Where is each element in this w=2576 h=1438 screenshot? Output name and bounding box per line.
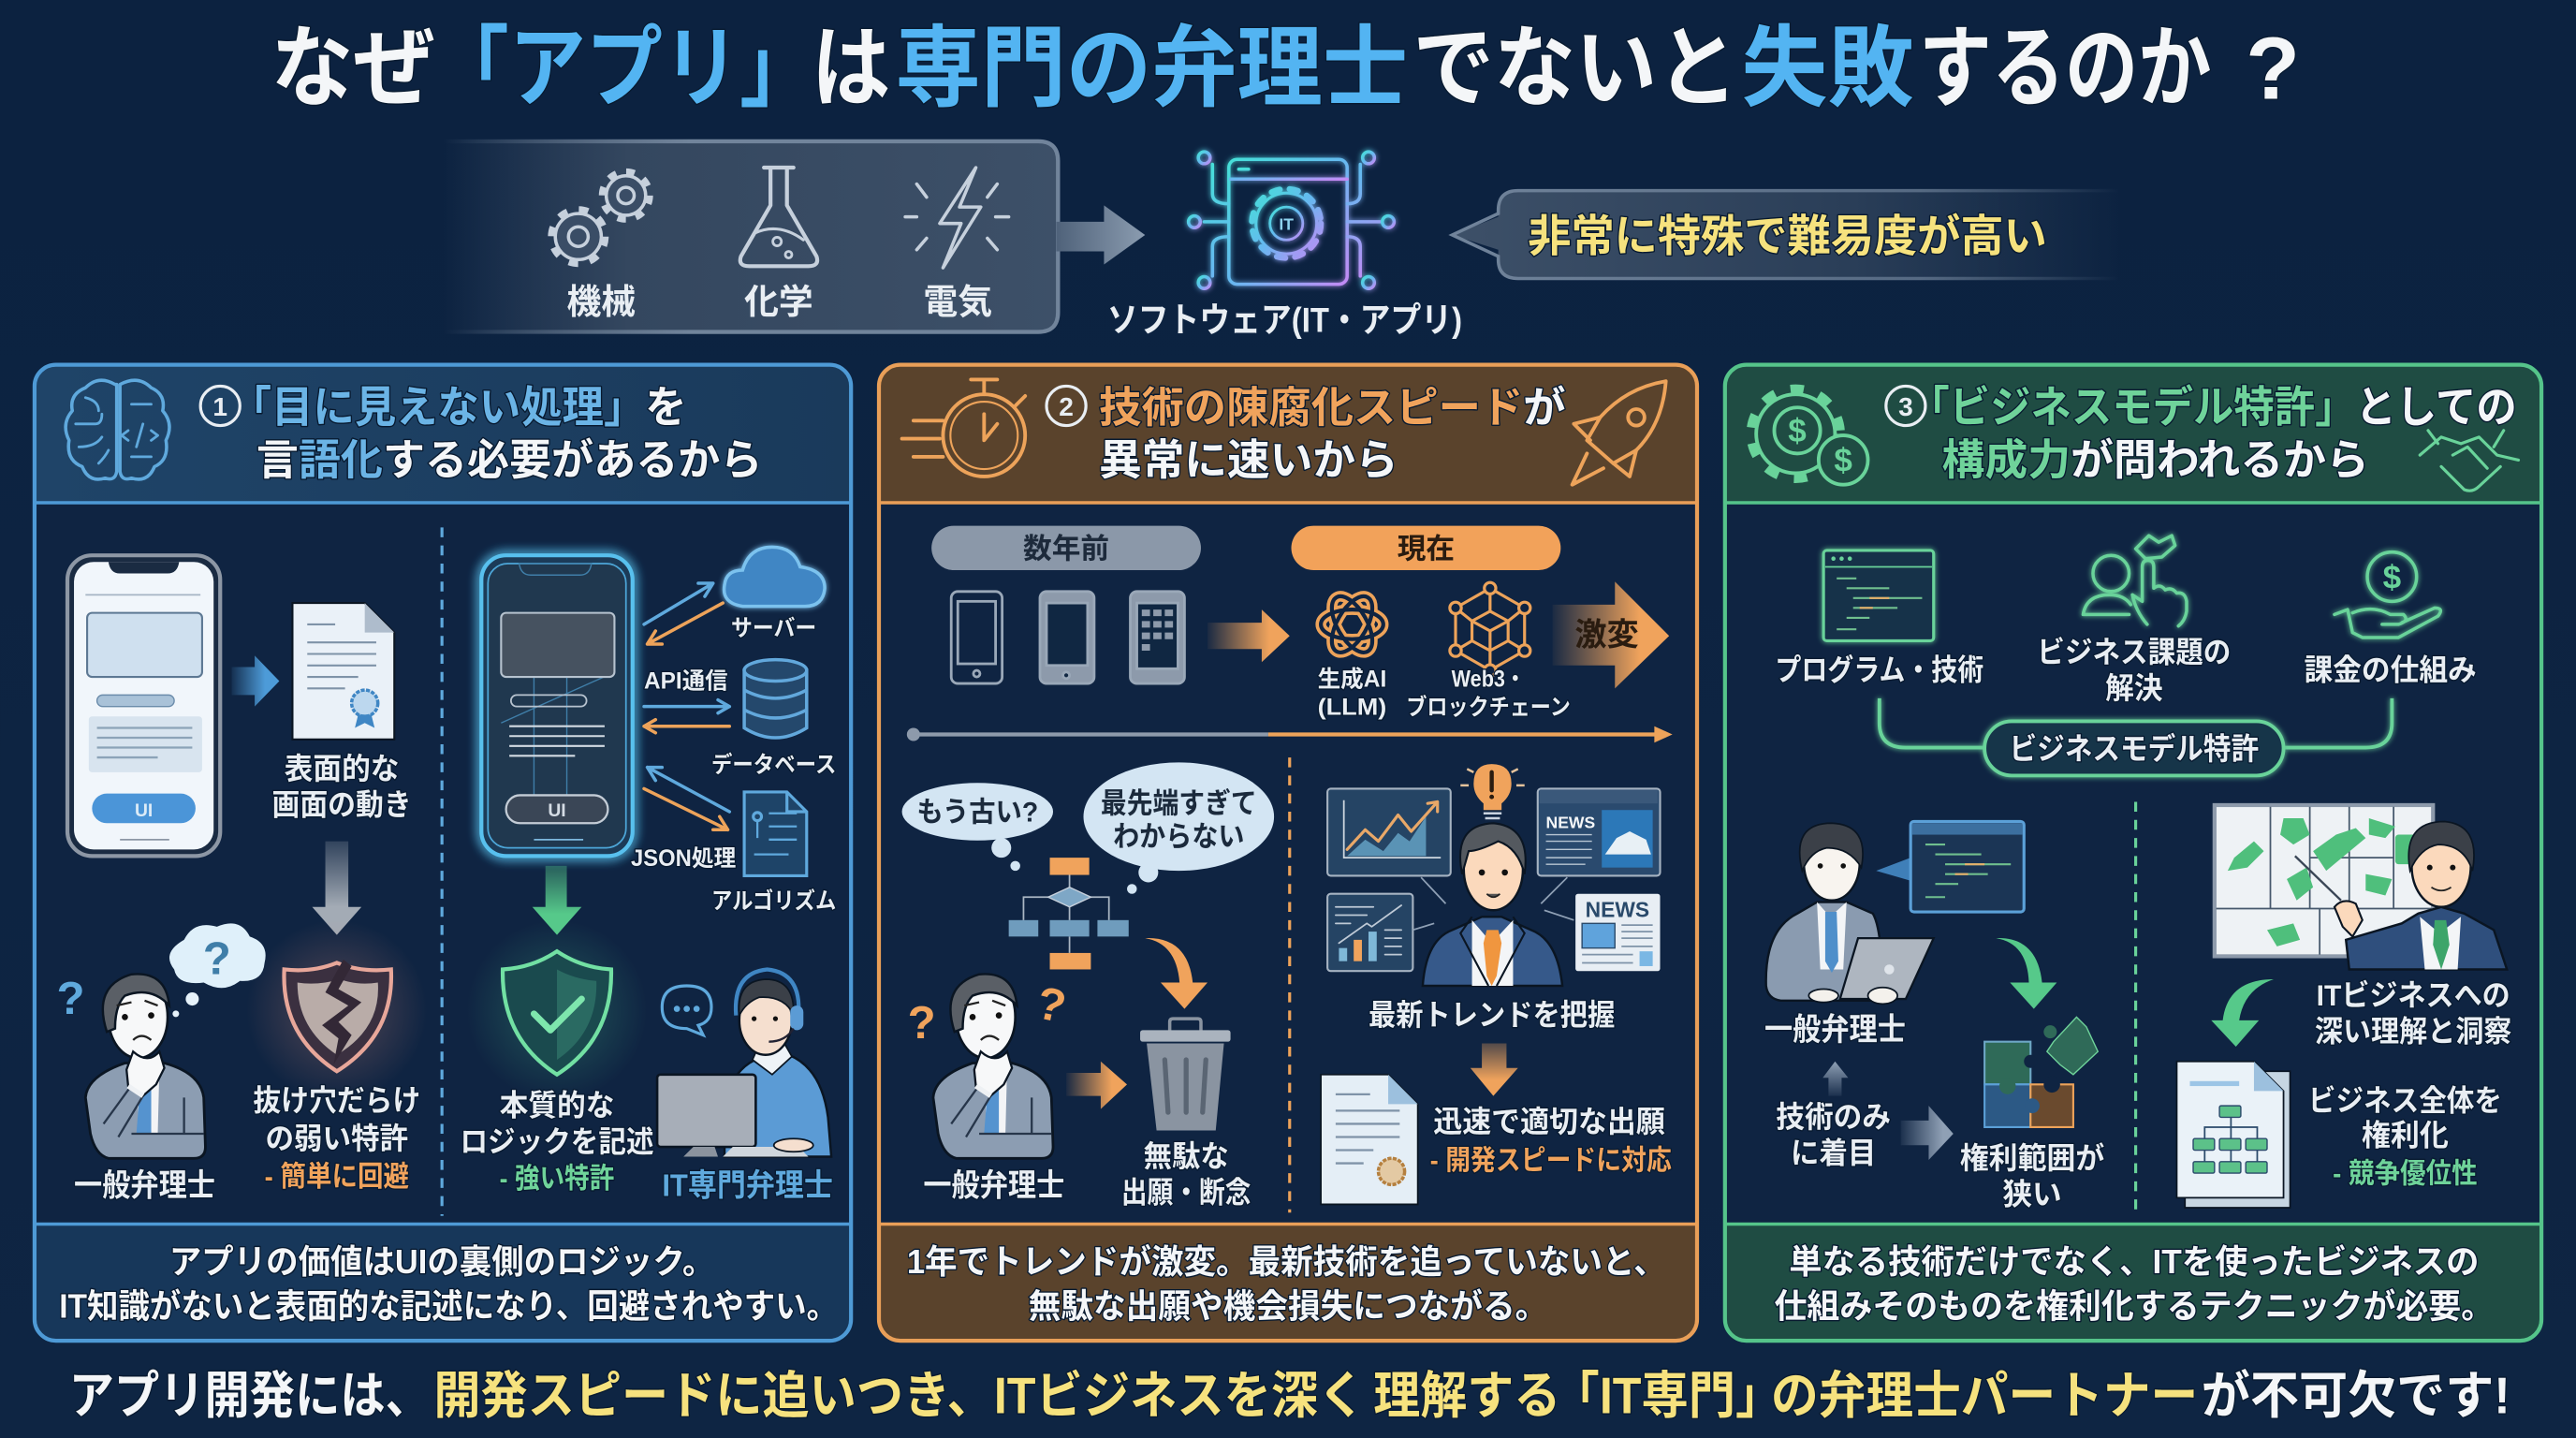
label: business problem: ビジネス課題の xyxy=(2037,635,2231,668)
label: IT business: ITビジネスへの xyxy=(2317,978,2510,1012)
label: general attorney: 一般弁理士 xyxy=(74,1169,215,1204)
icon: general attorney thinking xyxy=(933,974,1053,1158)
label: weak patent: の弱い特許 xyxy=(265,1122,408,1155)
heading number: 2 xyxy=(1059,392,1074,421)
pill: years ago xyxy=(931,526,1201,570)
heading number xyxy=(1886,386,1925,426)
connector xyxy=(1950,591,2323,593)
panel 2 footer xyxy=(879,1224,1697,1341)
callout: very special and difficult xyxy=(1453,190,2119,279)
speech bubble: too cutting edge: わからない xyxy=(1113,820,1244,853)
icon: person with pointing hand xyxy=(2083,536,2187,626)
icon: question marks xyxy=(908,977,1070,1049)
label: blockchain: ブロックチェーン xyxy=(1406,693,1571,720)
title: 「アプリ」 xyxy=(432,19,816,118)
panel 1 footer xyxy=(35,1224,851,1341)
phone: UI surface xyxy=(67,555,220,856)
icon: question marks: ? xyxy=(1032,977,1070,1033)
icon: patent document xyxy=(292,603,394,740)
callout: very special and difficult: 非常に特殊で難易度が高い xyxy=(1528,213,2047,262)
label: LLM: (LLM) xyxy=(1318,695,1386,720)
pointer lines xyxy=(1412,877,1573,930)
speech bubble: too cutting edge: 最先端すぎて xyxy=(1101,787,1257,820)
label: filing, abandonment: 出願・断念 xyxy=(1121,1176,1251,1210)
speech bubble: already old?: もう古い? xyxy=(916,798,1038,829)
icon: thought bubble xyxy=(169,923,266,1017)
icon: lightning bolt xyxy=(905,168,1009,268)
panel 3: business model patents xyxy=(1725,365,2541,1341)
bottom message xyxy=(69,1367,2510,1424)
title: は xyxy=(812,19,890,118)
label: 化学: 化学 xyxy=(744,283,813,321)
icon: web3 network xyxy=(1450,582,1530,676)
arrow: curved to puzzle xyxy=(1996,938,2056,1009)
bottom message: ITビジネスを深く xyxy=(994,1367,1365,1424)
pill: years ago: 数年前 xyxy=(1023,533,1109,565)
panel 3 footer: 仕組みそのものを権利化するテクニックが必要。 xyxy=(1774,1287,2494,1326)
label: deep understanding: 深い理解と洞察 xyxy=(2315,1015,2511,1049)
panel 1 heading line 2: 言語化する必要があるから xyxy=(256,436,762,484)
arrow: up xyxy=(1822,1062,1848,1096)
code bubble xyxy=(1876,822,2024,912)
icon: dollar sign: $ xyxy=(2383,559,2402,595)
business model patent connector: ビジネスモデル特許 xyxy=(2009,731,2259,766)
arrow: to filing xyxy=(1471,1043,1518,1096)
title: するのか xyxy=(1919,19,2211,118)
label: competitive advantage: - 競争優位性 xyxy=(2333,1159,2478,1190)
icon: broken shield xyxy=(246,920,427,1101)
bottom message: 開発スピードに追いつき、 xyxy=(433,1367,994,1424)
panel 2 header xyxy=(879,365,1697,503)
label: generative AI: 生成AI xyxy=(1318,667,1386,693)
panel 1 footer: IT知識がないと表面的な記述になり、回避されやすい。 xyxy=(59,1287,838,1326)
label: wasteful: 無駄な xyxy=(1144,1139,1229,1173)
arrow: dramatic change xyxy=(1553,581,1669,688)
icon: thought bubble: ? xyxy=(203,934,231,985)
label: Web3: Web3・ xyxy=(1452,668,1526,693)
icon: presenting attorney xyxy=(2295,822,2507,969)
label: narrow rights: 権利範囲が xyxy=(1960,1141,2104,1175)
arrow: curved to doc xyxy=(2211,979,2274,1047)
icon: software chip xyxy=(1189,152,1394,288)
icon: org chart document xyxy=(2176,1062,2291,1208)
heading number: 1 xyxy=(212,392,227,421)
chart screen xyxy=(1327,788,1451,875)
icon: old phones xyxy=(951,592,1184,683)
icon: brain xyxy=(66,380,169,479)
icon: software chip: IT xyxy=(1279,215,1294,234)
panel 2 footer: 無駄な出願や機会損失につながる。 xyxy=(1029,1287,1547,1326)
label: logic described: ロジックを記述 xyxy=(460,1124,654,1158)
panel 2 heading line 2: 異常に速いから xyxy=(1099,436,1398,484)
label: 電気: 電気 xyxy=(923,283,992,321)
label: software: ソフトウェア(IT・アプリ) xyxy=(1107,301,1462,340)
panel 3 heading: 「ビジネスモデル特許」としての xyxy=(1909,383,2517,432)
pill: now xyxy=(1292,526,1560,570)
icon: data flow arrows xyxy=(644,583,729,829)
icon: cloud server xyxy=(724,547,825,607)
label: general attorney: 一般弁理士 xyxy=(923,1169,1064,1204)
icon: attorney with laptop xyxy=(1766,823,1934,1004)
panel 2: obsolescence speed xyxy=(879,365,1697,1341)
label: surface: 表面的な xyxy=(285,752,400,785)
bottom message: が不可欠です! xyxy=(2202,1367,2510,1424)
icon: dollar signs: $ xyxy=(1834,443,1852,479)
label: keeps up with development: - 開発スピードに対応 xyxy=(1430,1146,1672,1177)
label: solving: 解決 xyxy=(2105,671,2163,705)
title: でないと xyxy=(1412,19,1738,118)
bottom message: 理解する xyxy=(1373,1367,1560,1424)
label: prompt filing: 迅速で適切な出願 xyxy=(1433,1105,1665,1138)
bottom message: の弁理士パートナー xyxy=(1771,1367,2198,1424)
label: focus: に着目 xyxy=(1791,1137,1876,1170)
icon: puzzle xyxy=(1984,1017,2098,1127)
panel 3 header xyxy=(1725,365,2541,503)
heading number xyxy=(1046,386,1086,426)
icon: flask xyxy=(740,168,817,266)
timeline xyxy=(907,726,1673,742)
label: algorithm: アルゴリズム xyxy=(711,888,836,915)
flowchart xyxy=(1009,858,1129,969)
icon: speech dots xyxy=(662,986,711,1035)
arrow: to software xyxy=(1057,205,1145,265)
label: easily avoided: - 簡単に回避 xyxy=(265,1160,409,1193)
icon: gear and dollar xyxy=(1751,389,1868,485)
icon: IT attorney xyxy=(657,969,831,1157)
panel: existing fields (mechanical, chemical, electrical) xyxy=(444,139,1060,333)
icon: dollar signs xyxy=(1788,413,1852,479)
heading number: 3 xyxy=(1898,392,1913,421)
label: general attorney: 一般弁理士 xyxy=(1764,1013,1906,1048)
label: full of holes: 抜け穴だらけ xyxy=(253,1083,420,1117)
title: 専門の弁理士 xyxy=(896,19,1408,118)
label: focus on tech only: 技術のみ xyxy=(1776,1100,1891,1134)
icon: dollar signs: $ xyxy=(1788,413,1807,449)
news screen xyxy=(1538,788,1661,875)
phone: glowing logic: UI xyxy=(548,801,566,821)
icon: question marks: ? xyxy=(908,998,936,1049)
panel 2 footer: 1年でトレンドが激変。最新技術を追っていないと、 xyxy=(907,1242,1666,1281)
label: strong patent: - 強い特許 xyxy=(500,1162,614,1195)
panel 1 heading: 「目に見えない処理」を xyxy=(230,383,687,432)
bottom message: 「IT専門」 xyxy=(1553,1367,1782,1424)
arrow: curved to trash xyxy=(1145,938,1208,1009)
heading number xyxy=(200,386,240,426)
icon: strong shield xyxy=(466,920,648,1101)
title: なぜ xyxy=(271,19,435,118)
icon: generative AI knot xyxy=(1321,590,1383,659)
label: rights: 権利化 xyxy=(2362,1118,2449,1152)
icon: code window xyxy=(1823,550,1934,640)
arrow: phone to document xyxy=(232,655,279,707)
label: server: サーバー xyxy=(731,616,816,641)
label: whole business: ビジネス全体を xyxy=(2308,1083,2502,1117)
label: API: API通信 xyxy=(644,668,728,694)
arrow: dramatic change: 激変 xyxy=(1574,618,1639,653)
phone: glowing logic xyxy=(481,555,633,856)
icon: question mark: ? xyxy=(57,974,85,1024)
label: IT attorney: IT専門弁理士 xyxy=(662,1169,833,1204)
icon: gears xyxy=(552,172,649,263)
icon: coin and hand xyxy=(2334,552,2440,638)
business model patent connector xyxy=(1880,698,2392,775)
label: narrow: 狭い xyxy=(2002,1177,2062,1211)
icon: handshake xyxy=(2420,431,2519,491)
label: billing mechanism: 課金の仕組み xyxy=(2304,653,2477,687)
panel 3 footer: 単なる技術だけでなく、ITを使ったビジネスの xyxy=(1789,1242,2479,1281)
icon: trend aware attorney xyxy=(1423,823,1562,986)
title: 失敗 xyxy=(1741,19,1914,118)
title: ? xyxy=(2246,19,2300,118)
panel 2 heading: 技術の陳腐化スピードが xyxy=(1099,384,1566,432)
label: program and tech: プログラム・技術 xyxy=(1775,653,1983,687)
panel 1 header xyxy=(35,365,851,503)
label: JSON: JSON処理 xyxy=(631,845,736,872)
pill: now: 現在 xyxy=(1398,533,1455,565)
label: 機械: 機械 xyxy=(567,283,636,321)
arrow: attorney to trash xyxy=(1066,1062,1127,1109)
news screen: NEWS xyxy=(1546,814,1595,832)
newspaper xyxy=(1575,894,1661,971)
icon: patent document xyxy=(1321,1075,1418,1204)
icon: alert bulb xyxy=(1460,764,1525,818)
panel 3 footer xyxy=(1725,1224,2541,1341)
newspaper: NEWS xyxy=(1586,897,1649,921)
icon: rocket xyxy=(1573,381,1666,485)
icon: stopwatch xyxy=(902,379,1025,477)
panel 3 heading line 2: 構成力が問われるから xyxy=(1942,436,2369,484)
arrow: down to weak patent xyxy=(313,842,361,935)
label: essential: 本質的な xyxy=(500,1089,614,1123)
arrow: right xyxy=(1901,1106,1954,1160)
panel 1: invisible processing xyxy=(35,365,851,1341)
phone: UI surface: UI xyxy=(135,801,153,821)
title xyxy=(271,19,2300,118)
speech bubble: too cutting edge xyxy=(1083,762,1274,894)
bottom message: アプリ開発には、 xyxy=(69,1367,431,1424)
icon: general attorney thinking xyxy=(85,974,205,1158)
icon: database xyxy=(744,660,807,738)
small chart screen xyxy=(1327,894,1412,971)
icon: trash can xyxy=(1140,1019,1231,1130)
speech bubble: already old? xyxy=(902,783,1053,871)
business model canvas board xyxy=(2215,805,2433,956)
arrow: past to present xyxy=(1208,609,1290,662)
icon: algorithm doc xyxy=(744,792,807,875)
arrow: down to strong patent xyxy=(533,866,581,935)
label: screen motion: 画面の動き xyxy=(272,787,412,821)
label: database: データベース xyxy=(711,751,836,778)
panel 1 footer: アプリの価値はUIの裏側のロジック。 xyxy=(169,1242,714,1281)
label: grasp latest trends: 最新トレンドを把握 xyxy=(1368,998,1615,1032)
